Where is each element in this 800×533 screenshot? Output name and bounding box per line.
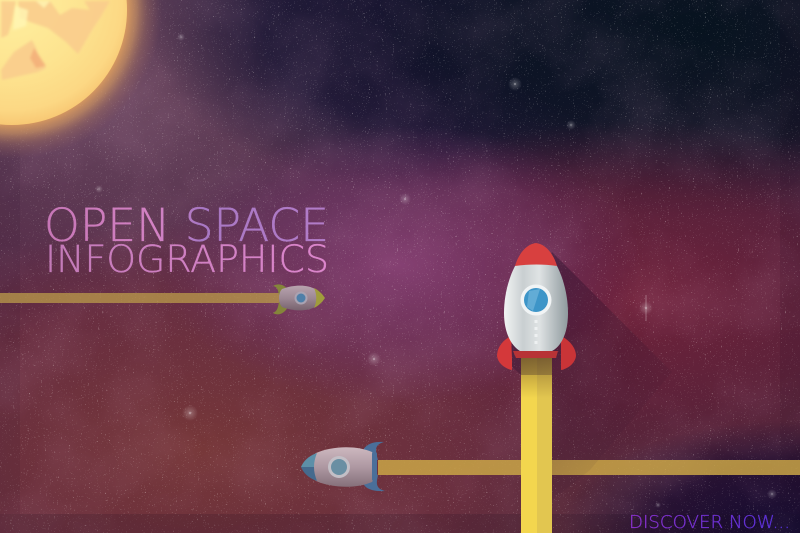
horizontal exhaust beam: bottom bbox=[378, 460, 800, 475]
title line: infographics: INFOGRAPHICS bbox=[45, 238, 329, 281]
bottom rocket bbox=[301, 442, 385, 491]
hull bbox=[310, 447, 375, 487]
fins bbox=[497, 336, 512, 370]
sun bbox=[0, 0, 165, 160]
nose cone bbox=[515, 243, 557, 266]
hull bbox=[504, 245, 568, 351]
horizontal exhaust beam: top bbox=[0, 293, 282, 303]
collar bbox=[513, 351, 558, 358]
rocket long shadow bbox=[505, 252, 672, 500]
fins bbox=[273, 284, 288, 295]
glowing stars bbox=[95, 33, 777, 508]
fins bbox=[362, 442, 384, 460]
nose cone bbox=[301, 453, 317, 481]
window bbox=[294, 292, 308, 304]
collar bbox=[372, 452, 377, 481]
discover now link: DISCOVER NOW... bbox=[629, 512, 790, 533]
title bbox=[44, 199, 329, 281]
nose cone bbox=[314, 288, 325, 308]
window bbox=[328, 456, 350, 478]
title line: open space: OPEN SPACE bbox=[44, 199, 329, 252]
vertical rocket bbox=[497, 243, 576, 370]
hull bbox=[279, 286, 318, 310]
top rocket bbox=[273, 284, 325, 314]
vertical exhaust beam bbox=[521, 358, 552, 533]
rivets bbox=[534, 320, 538, 344]
window bbox=[520, 284, 552, 316]
